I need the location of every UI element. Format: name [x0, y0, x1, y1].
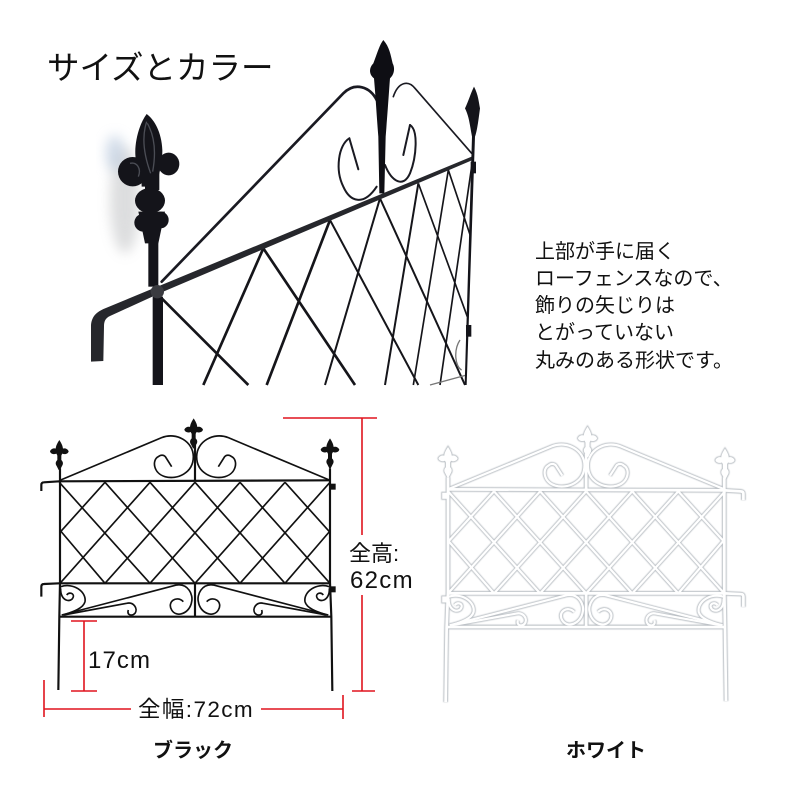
label: white: ホワイト — [566, 740, 646, 762]
dimension: total height: 全高: — [349, 541, 399, 566]
text block: description: 上部が手に届く — [535, 240, 675, 263]
upper arch wire — [162, 83, 472, 282]
wall shadow behind finial — [106, 135, 140, 253]
title: サイズとカラー — [47, 50, 274, 86]
text block: description: 丸みのある形状です。 — [535, 349, 733, 372]
text block: description — [535, 240, 733, 372]
white fence diagram — [438, 427, 743, 702]
photo: close-up of black fence — [91, 40, 480, 385]
dimension: total height — [283, 418, 414, 691]
black fence diagram — [41, 418, 339, 691]
dimension: total width: 全幅:72cm — [138, 697, 254, 722]
dimension: total height: 62cm — [350, 567, 414, 594]
text block: description: ローフェンスなので、 — [535, 268, 733, 290]
finial highlights — [130, 122, 154, 177]
text block: description: 飾りの矢じりは — [535, 294, 675, 317]
label: black: ブラック — [153, 738, 233, 762]
left post and finial — [118, 114, 179, 385]
dimension: ground stake — [71, 621, 151, 691]
dimension: ground stake: 17cm — [88, 647, 151, 674]
text block: description: とがっていない — [535, 321, 674, 344]
right finial and post — [465, 87, 480, 385]
top rail with hook — [91, 157, 473, 362]
center finial and post — [370, 40, 394, 193]
lattice wires — [162, 167, 472, 385]
dimension: total width — [44, 680, 343, 722]
